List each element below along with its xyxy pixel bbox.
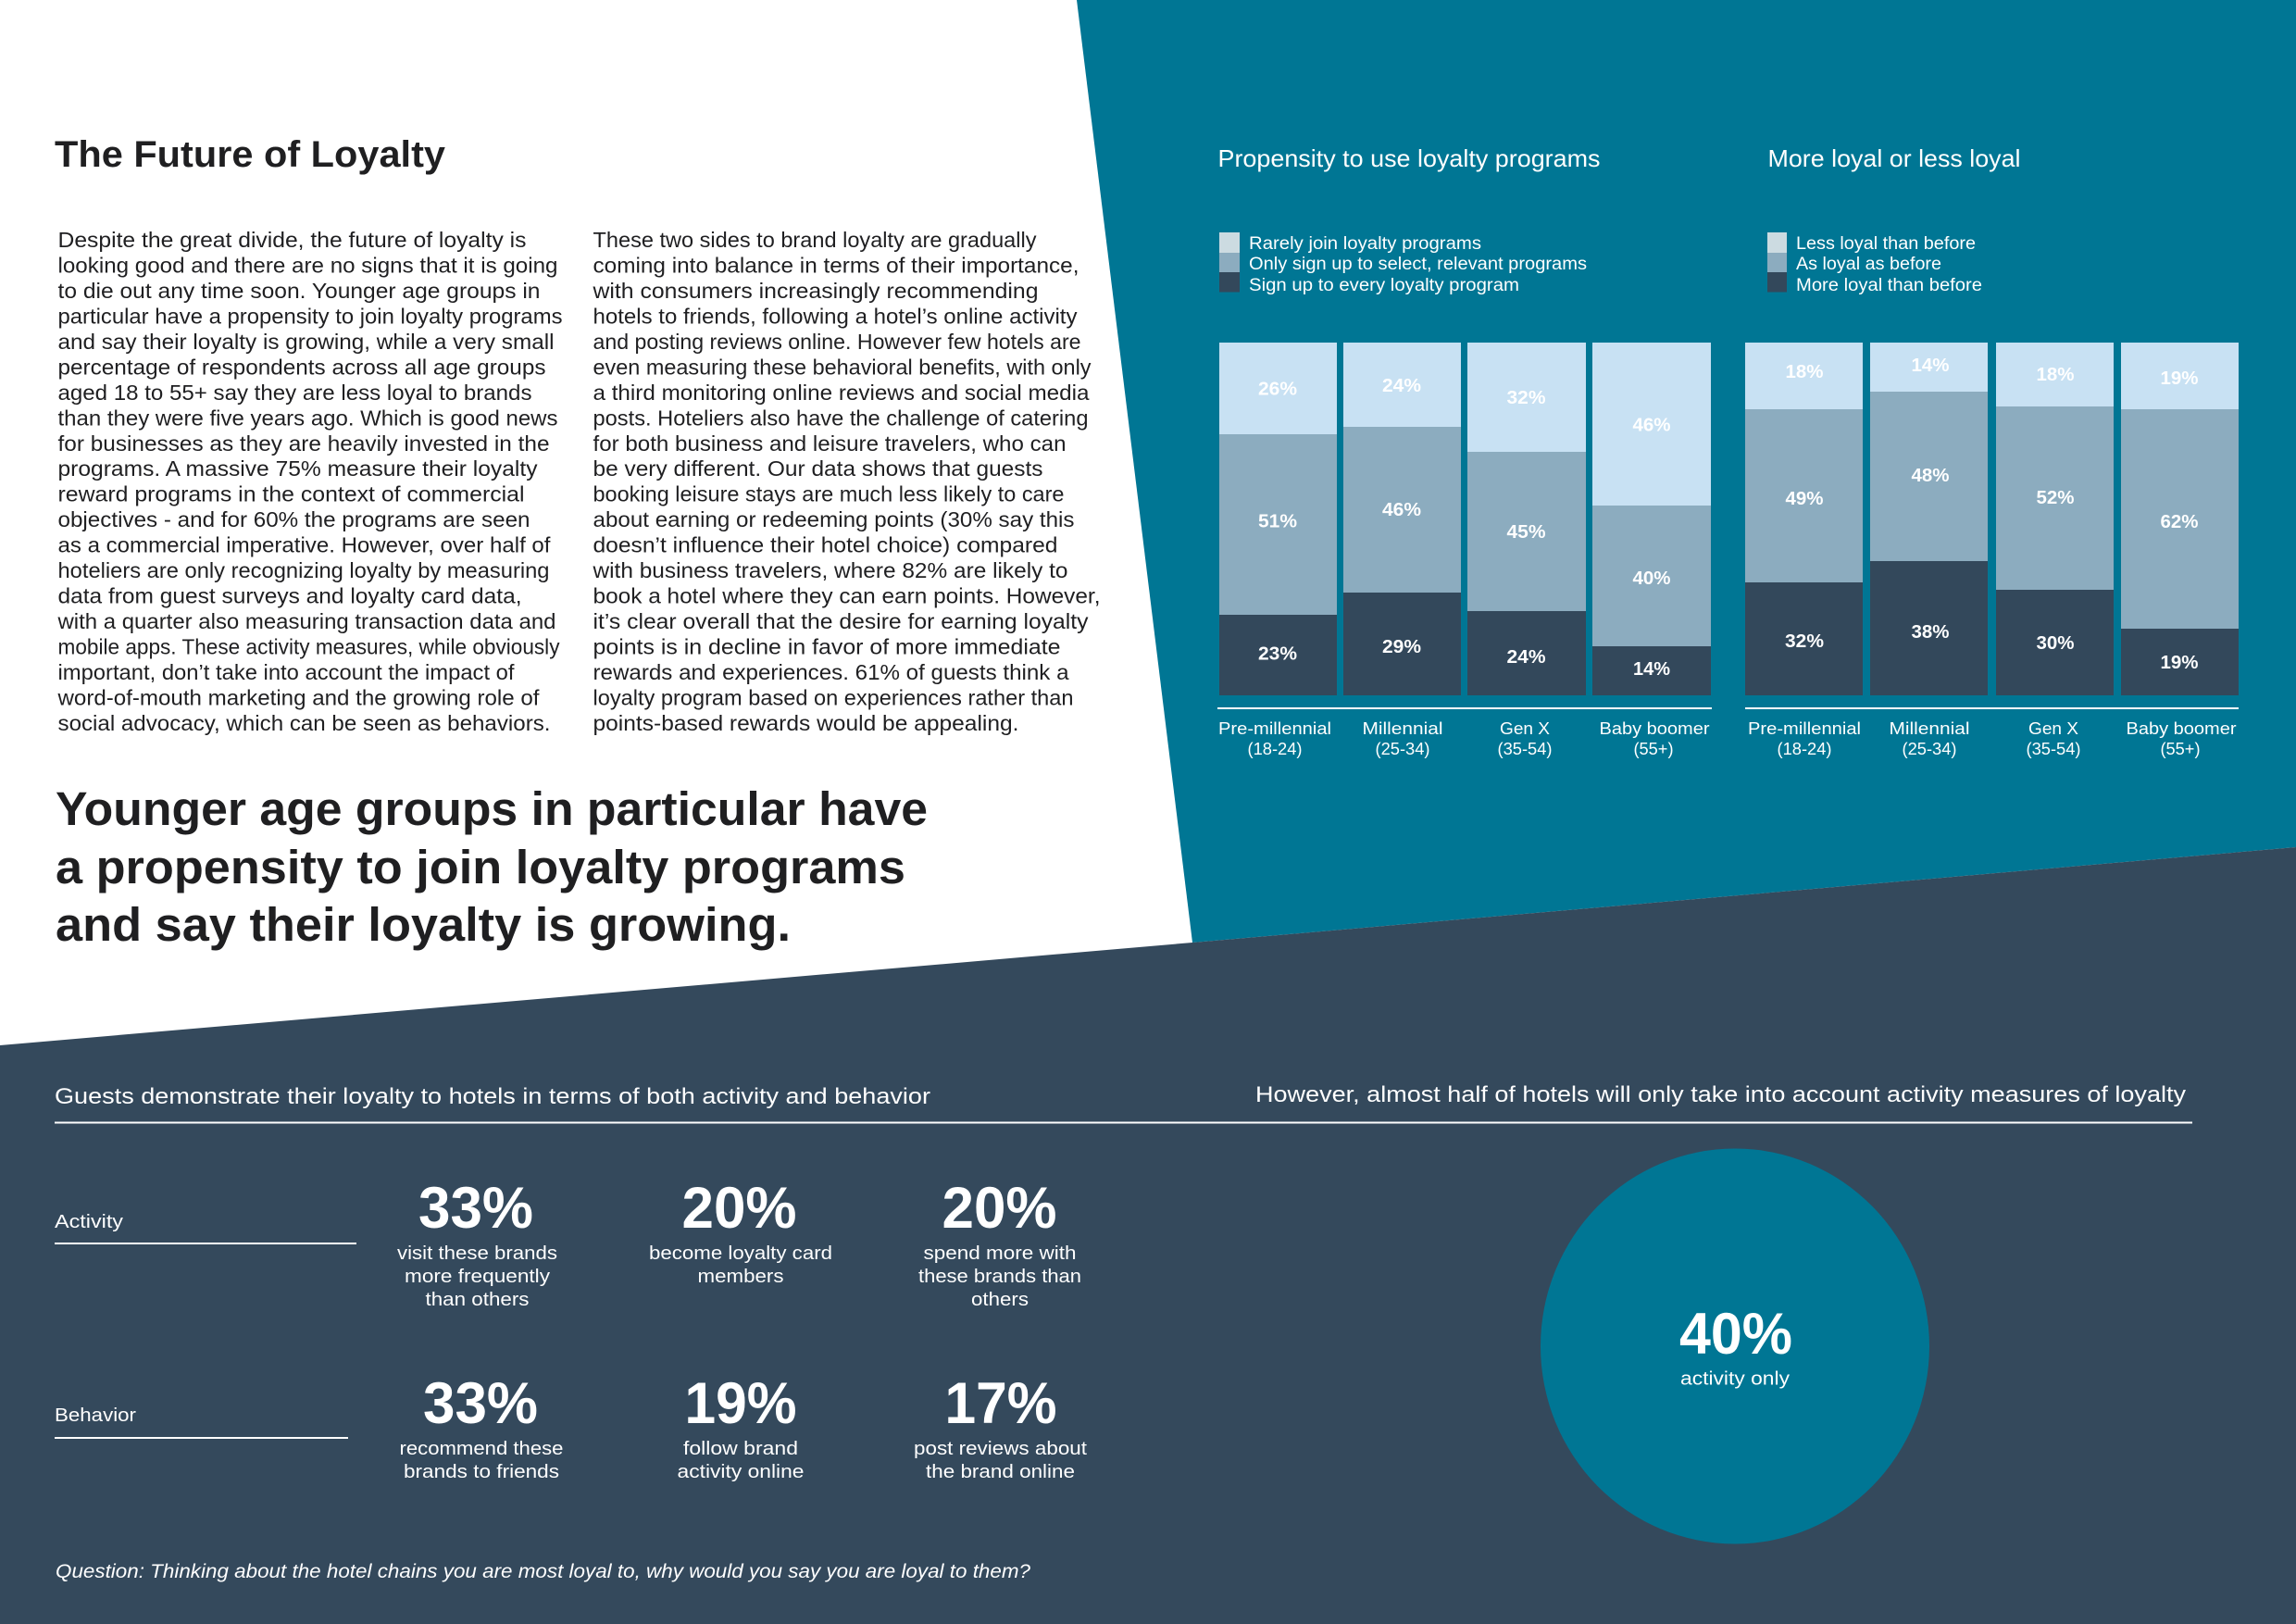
text block: first body column: particular have a propensity to join loyalty programs xyxy=(57,304,563,328)
label: activity: Activity xyxy=(55,1211,124,1232)
text block: first body column xyxy=(56,228,563,735)
chart: 40% activity only circle: activity only xyxy=(1680,1368,1791,1389)
text block: first body column: objectives - and for 60% the programs are seen xyxy=(57,507,530,531)
text block: first body column: aged 18 to 55+ say they are less loyal to brands xyxy=(57,381,531,405)
text block: first body column: programs. A massive 75% measure their loyalty xyxy=(57,456,538,481)
axis: propensity age groups xyxy=(1217,707,1712,758)
heading: activity and behavior: Guests demonstrate their loyalty to hotels in terms of both activity and behavior xyxy=(55,1084,930,1109)
stat: 33% recommend to friends xyxy=(400,1371,563,1482)
text block: second body column: book a hotel where they can earn points. However, xyxy=(593,584,1100,608)
text block: first body column: for businesses as they are heavily invested in the xyxy=(57,431,550,456)
axis: loyalty change age groups: Gen X xyxy=(2028,718,2078,738)
stat: 33% recommend to friends: 33% xyxy=(423,1371,538,1436)
text block: second body column: it’s clear overall that the desire for earning loyalty xyxy=(593,609,1089,633)
text block: second body column: with business travelers, where 82% are likely to xyxy=(592,558,1068,582)
bar chart: loyalty change stacked bars: 49% xyxy=(1785,488,1824,509)
footnote: survey question: Question: Thinking about the hotel chains you are most loyal to, why would you say you are loyal to them? xyxy=(56,1560,1030,1582)
stat: 33% visit more frequently: more frequently xyxy=(405,1266,551,1287)
chart: 40% activity only circle xyxy=(1541,1148,1929,1544)
stat: 33% visit more frequently: than others xyxy=(426,1289,530,1310)
text block: second body column: even measuring these behavioral benefits, with only xyxy=(593,355,1092,379)
text block: second body column: points-based rewards would be appealing. xyxy=(593,711,1018,735)
bar chart: loyalty change stacked bars: 62% xyxy=(2161,511,2198,532)
title: The Future of Loyalty xyxy=(55,134,446,175)
label: behavior: Behavior xyxy=(55,1405,136,1426)
stat: 20% spend more: spend more with xyxy=(924,1243,1076,1264)
stat: 19% follow online xyxy=(678,1371,804,1482)
axis: loyalty change age groups: (25-34) xyxy=(1902,739,1957,758)
text block: first body column: to die out any time soon. Younger age groups in xyxy=(57,279,541,303)
bar chart: propensity stacked bars: 24% xyxy=(1382,375,1421,396)
callout: pull quote xyxy=(56,782,928,951)
text block: first body column: reward programs in the context of commercial xyxy=(57,482,524,506)
text block: first body column: mobile apps. These activity measures, while obviously xyxy=(57,635,560,659)
bar chart: propensity stacked bars xyxy=(1219,343,1711,695)
legend: loyalty change chart: Less loyal than before xyxy=(1796,234,1976,254)
axis: propensity age groups: Millennial xyxy=(1363,718,1442,738)
axis: propensity age groups: (35-54) xyxy=(1498,739,1552,758)
legend: propensity chart: Only sign up to select, relevant programs xyxy=(1249,255,1587,274)
text block: second body column: rewards and experiences. 61% of guests think a xyxy=(593,660,1069,684)
text block: first body column: data from guest surveys and loyalty card data, xyxy=(57,584,522,608)
axis: propensity age groups: (25-34) xyxy=(1376,739,1429,758)
text block: first body column: hoteliers are only recognizing loyalty by measuring xyxy=(57,558,550,582)
bar chart: loyalty change stacked bars: 48% xyxy=(1911,465,1950,486)
bar chart: propensity stacked bars: 23% xyxy=(1258,643,1297,665)
axis: loyalty change age groups xyxy=(1745,707,2239,758)
stat: 33% visit more frequently: visit these brands xyxy=(397,1243,557,1264)
axis: loyalty change age groups: Pre-millennial xyxy=(1748,718,1861,738)
callout: pull quote: Younger age groups in particular have xyxy=(56,782,928,835)
bar chart: propensity stacked bars: 26% xyxy=(1258,378,1297,400)
callout: pull quote: a propensity to join loyalty programs xyxy=(56,841,905,893)
bar chart: loyalty change stacked bars: 30% xyxy=(2037,632,2074,654)
legend: propensity chart xyxy=(1219,232,1587,295)
panel: loyalty change chart xyxy=(1745,144,2239,758)
stat: 20% loyalty card members: become loyalty card xyxy=(649,1243,832,1264)
stat: 20% loyalty card members: members xyxy=(698,1266,783,1287)
bar chart: loyalty change stacked bars: 38% xyxy=(1911,621,1950,643)
bar chart: loyalty change stacked bars: 18% xyxy=(2037,364,2074,385)
text block: second body column: coming into balance in terms of their importance, xyxy=(593,254,1079,278)
text block: second body column: hotels to friends, following a hotel’s online activity xyxy=(593,304,1078,328)
stat: 17% post reviews: the brand online xyxy=(926,1461,1075,1482)
stat: 17% post reviews xyxy=(914,1371,1087,1482)
text block: first body column: percentage of respondents across all age groups xyxy=(57,355,546,379)
stat: 33% recommend to friends: brands to friends xyxy=(404,1461,559,1482)
stat: 20% spend more: 20% xyxy=(942,1176,1057,1241)
stat: 20% spend more: others xyxy=(971,1289,1029,1310)
panel: activity row xyxy=(55,1176,1081,1310)
panel: behavior row xyxy=(55,1371,1087,1482)
axis: loyalty change age groups: (35-54) xyxy=(2026,739,2081,758)
stat: 20% loyalty card members: 20% xyxy=(681,1176,796,1241)
stat: 19% follow online: follow brand xyxy=(683,1438,798,1459)
text block: second body column: a third monitoring online reviews and social media xyxy=(593,381,1090,405)
text block: second body column: be very different. Our data shows that guests xyxy=(593,456,1042,481)
bar chart: loyalty change stacked bars: 19% xyxy=(2161,652,2198,673)
text block: second body column: and posting reviews online. However few hotels are xyxy=(593,330,1081,354)
legend: loyalty change chart: As loyal as before xyxy=(1796,255,1941,274)
stat: 20% loyalty card members xyxy=(649,1176,832,1287)
bar chart: propensity stacked bars: 51% xyxy=(1258,511,1297,531)
stat: 19% follow online: activity online xyxy=(678,1461,804,1482)
bar chart: propensity stacked bars: 46% xyxy=(1382,499,1421,520)
bar chart: propensity stacked bars: 40% xyxy=(1633,568,1670,589)
stat: 17% post reviews: 17% xyxy=(944,1371,1057,1436)
stat: 20% spend more: these brands than xyxy=(918,1266,1081,1287)
stat: 19% follow online: 19% xyxy=(685,1371,796,1436)
axis: propensity age groups: Baby boomer xyxy=(1600,718,1709,738)
axis: propensity age groups: Gen X xyxy=(1500,718,1550,738)
bar chart: loyalty change stacked bars: 19% xyxy=(2161,368,2198,389)
text block: first body column: social advocacy, which can be seen as behaviors. xyxy=(57,711,550,735)
text block: second body column: for both business and leisure travelers, who can xyxy=(593,431,1067,456)
heading: activity measures: However, almost half of hotels will only take into account activity measures of loyalty xyxy=(1255,1082,2186,1107)
bar chart: propensity stacked bars: 14% xyxy=(1633,658,1670,680)
text block: second body column: doesn’t influence their hotel choice) compared xyxy=(593,533,1057,557)
bar chart: propensity stacked bars: 45% xyxy=(1507,521,1546,543)
text block: first body column: looking good and there are no signs that it is going xyxy=(57,254,557,278)
text block: second body column: These two sides to brand loyalty are gradually xyxy=(593,228,1037,252)
legend: propensity chart: Sign up to every loyalty program xyxy=(1249,276,1519,295)
text block: first body column: Despite the great divide, the future of loyalty is xyxy=(57,228,526,252)
stat: 20% spend more xyxy=(918,1176,1081,1310)
panel: teal chart background xyxy=(1077,0,2296,943)
legend: loyalty change chart: More loyal than before xyxy=(1796,276,1982,295)
bar chart: propensity stacked bars: 24% xyxy=(1507,646,1546,668)
stat: 33% visit more frequently xyxy=(397,1176,557,1310)
axis: propensity age groups: (18-24) xyxy=(1248,739,1302,758)
stat: 33% recommend to friends: recommend these xyxy=(400,1438,563,1459)
axis: propensity age groups: (55+) xyxy=(1633,739,1674,758)
bar chart: loyalty change stacked bars xyxy=(1745,343,2239,695)
axis: loyalty change age groups: (55+) xyxy=(2161,739,2200,758)
chart: 40% activity only circle: 40% xyxy=(1679,1302,1792,1367)
bar chart: propensity stacked bars: 29% xyxy=(1382,636,1421,657)
stat: 17% post reviews: post reviews about xyxy=(914,1438,1087,1459)
bar chart: loyalty change stacked bars: 32% xyxy=(1785,631,1824,652)
panel: propensity chart xyxy=(1217,144,1712,758)
legend: propensity chart: Rarely join loyalty programs xyxy=(1249,234,1481,254)
axis: loyalty change age groups: Baby boomer xyxy=(2126,718,2237,738)
heading: loyalty change chart: More loyal or less loyal xyxy=(1768,144,2020,172)
axis: loyalty change age groups: (18-24) xyxy=(1778,739,1831,758)
bar chart: propensity stacked bars: 32% xyxy=(1507,387,1546,408)
text block: second body column: points is in decline in favor of more immediate xyxy=(593,635,1061,659)
text block: second body column: booking leisure stays are much less likely to care xyxy=(593,482,1065,506)
text block: second body column: about earning or redeeming points (30% say this xyxy=(593,507,1074,531)
text block: first body column: than they were five years ago. Which is good news xyxy=(57,406,557,430)
bar chart: propensity stacked bars: 46% xyxy=(1633,415,1670,435)
callout: pull quote: and say their loyalty is growing. xyxy=(56,898,791,951)
text block: first body column: and say their loyalty is growing, while a very small xyxy=(57,330,554,354)
text block: first body column: as a commercial imperative. However, over half of xyxy=(57,533,551,557)
text block: second body column xyxy=(592,228,1100,735)
bar chart: loyalty change stacked bars: 52% xyxy=(2037,487,2074,508)
text block: first body column: important, don’t take into account the impact of xyxy=(57,660,515,684)
text block: first body column: word-of-mouth marketing and the growing role of xyxy=(56,685,540,709)
bar chart: loyalty change stacked bars: 14% xyxy=(1911,355,1950,376)
text block: second body column: with consumers increasingly recommending xyxy=(592,279,1039,303)
stat: 33% visit more frequently: 33% xyxy=(418,1176,533,1241)
heading: propensity chart: Propensity to use loyalty programs xyxy=(1218,144,1600,172)
legend: loyalty change chart xyxy=(1767,232,1982,295)
bar chart: loyalty change stacked bars: 18% xyxy=(1785,361,1824,382)
axis: loyalty change age groups: Millennial xyxy=(1889,718,1970,738)
panel: dark bottom background xyxy=(0,847,2296,1624)
axis: propensity age groups: Pre-millennial xyxy=(1218,718,1331,738)
text block: first body column: with a quarter also measuring transaction data and xyxy=(56,609,555,633)
text block: second body column: posts. Hoteliers also have the challenge of catering xyxy=(593,406,1089,430)
text block: second body column: loyalty program based on experiences rather than xyxy=(593,685,1074,709)
